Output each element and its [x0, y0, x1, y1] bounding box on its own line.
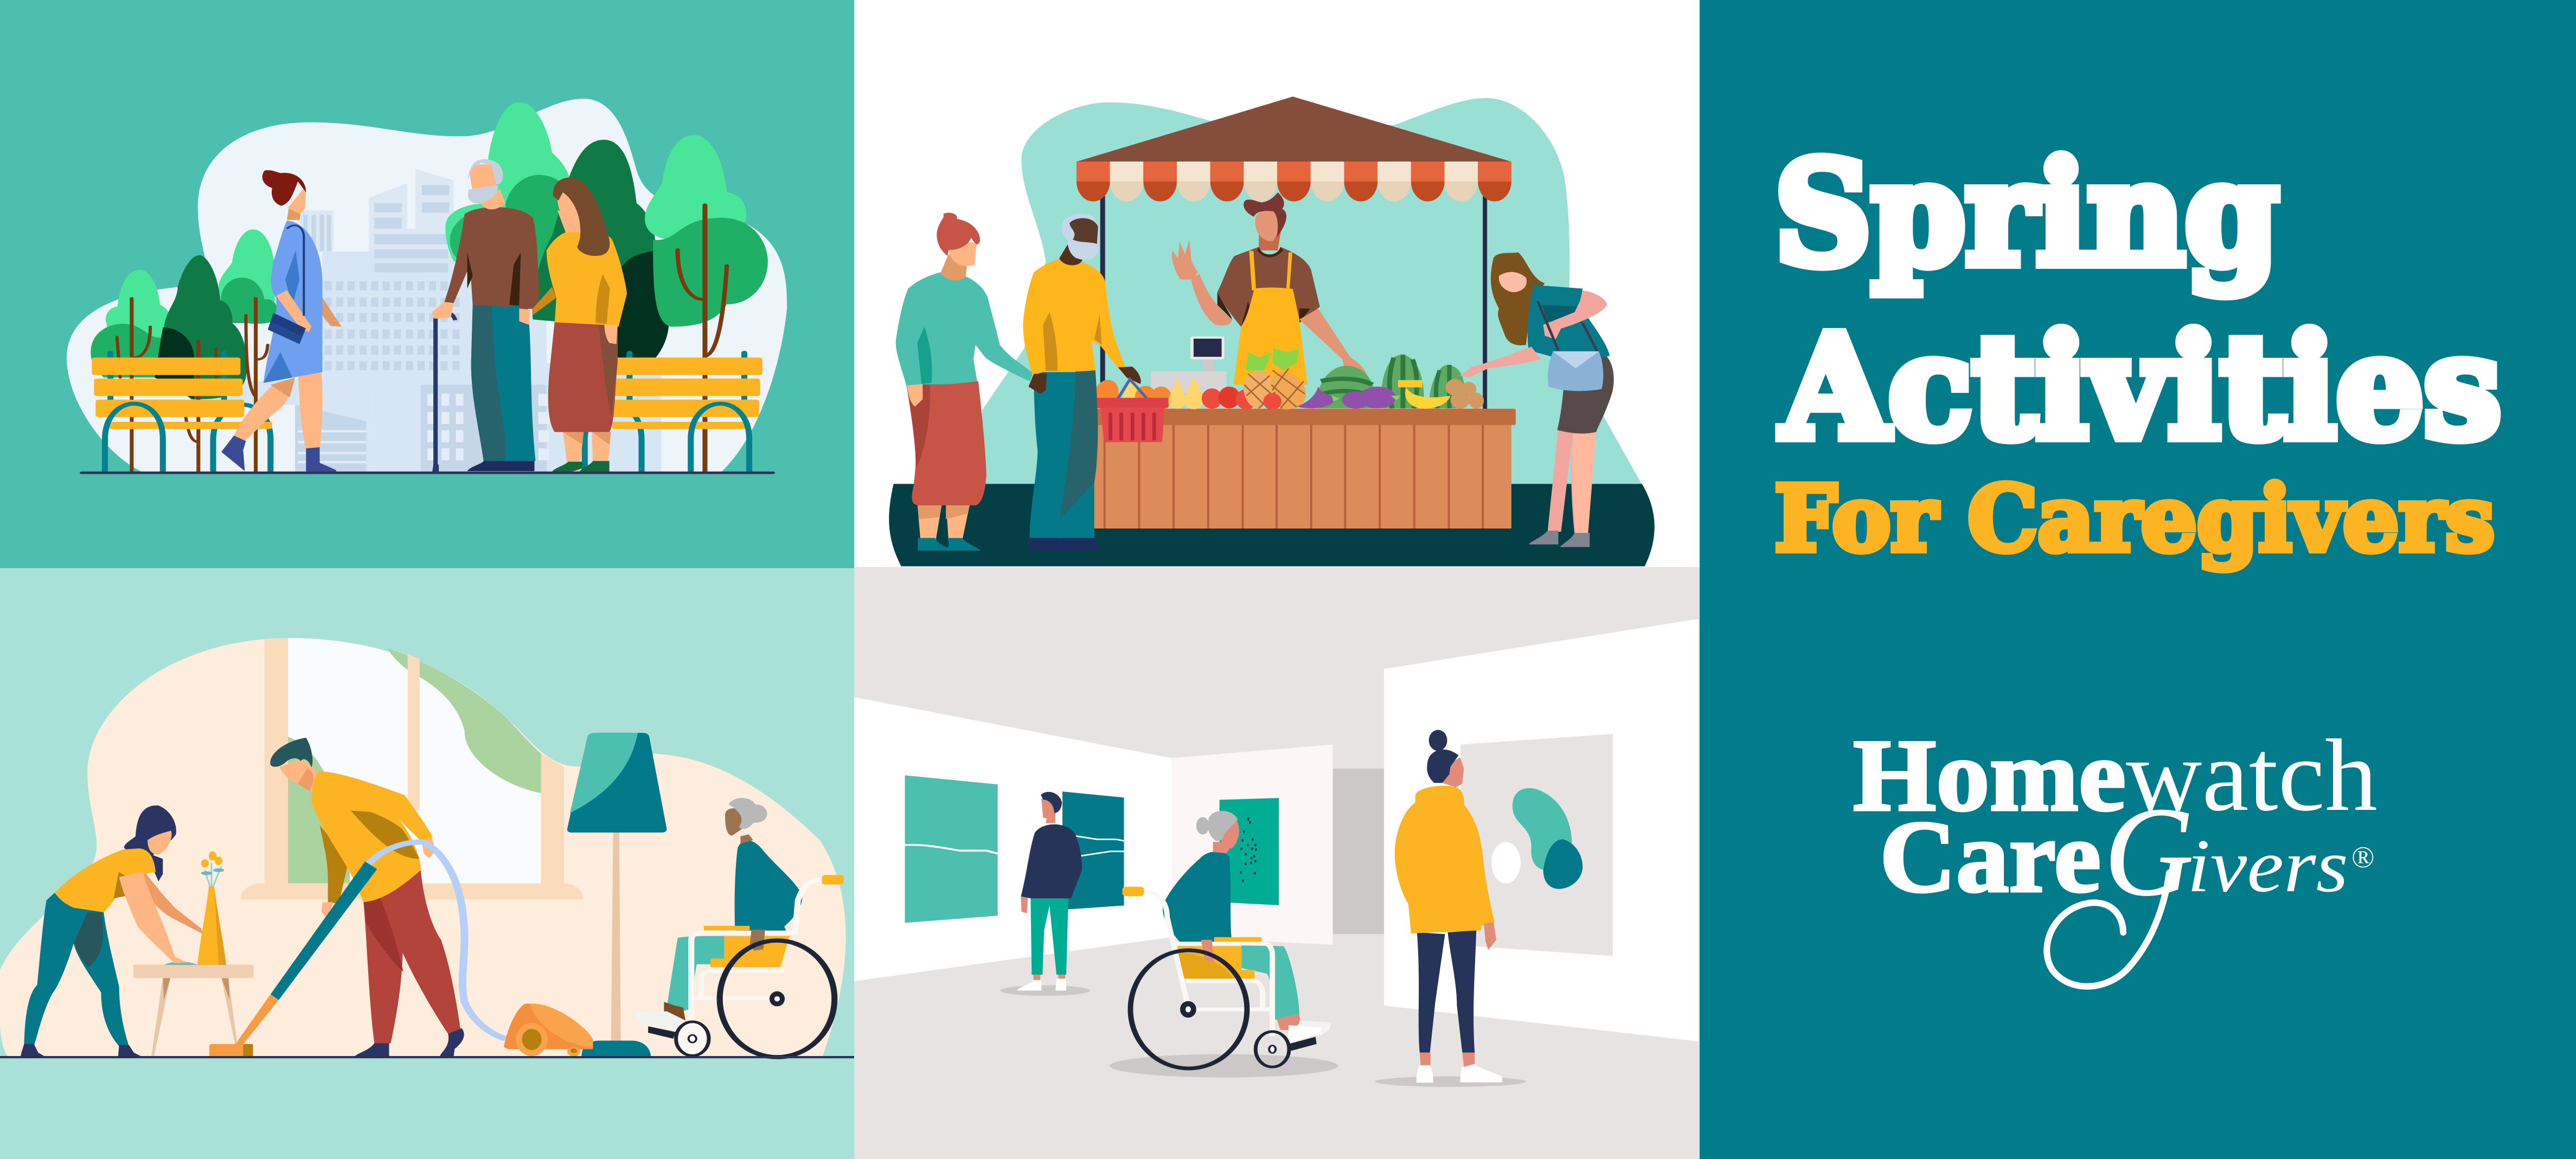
walking woman: [221, 170, 342, 472]
vendor: [1172, 192, 1368, 385]
counter: [1086, 409, 1516, 529]
elderly man with cane: [432, 159, 540, 472]
left bench: [92, 353, 272, 472]
shopping basket: [1097, 379, 1168, 442]
logo: Homewatch CareGivers: [1853, 719, 2378, 987]
title line: Activities: Activities: [1779, 304, 2501, 471]
man with basket: [1023, 214, 1141, 551]
woman in teal sweater: [896, 213, 1033, 551]
logo flourish: [2047, 873, 2169, 987]
panel: housework at home: [0, 568, 855, 1159]
logo: Homewatch CareGivers: watch: [2126, 719, 2378, 833]
title line: Spring: Spring: [1774, 130, 2279, 297]
panel: art gallery: [854, 567, 1700, 1159]
right bench: [585, 353, 762, 472]
park background blob: [67, 99, 787, 472]
painting: dark teal: [1062, 791, 1124, 910]
woman with shoulder bag: [1460, 252, 1614, 547]
window with view: [240, 638, 583, 899]
gallery walls: [854, 619, 1699, 1041]
subtitle: For Caregivers: For Caregivers: [1774, 466, 2495, 572]
painting: abstract shapes: [1460, 734, 1613, 956]
ground: [889, 484, 1655, 566]
vacuum cleaner: [209, 842, 593, 1057]
title: [1774, 130, 2501, 572]
market background blob: [982, 98, 1642, 485]
logo: Homewatch CareGivers: ®: [2351, 841, 2375, 874]
panel: walking in the park: [0, 0, 855, 570]
ground line: [80, 472, 775, 474]
floor lamp: [567, 733, 667, 1057]
man vacuuming: [270, 738, 464, 1057]
woman dusting: [21, 806, 203, 1057]
man looking at art: [1017, 792, 1082, 990]
woman in wheelchair: [634, 798, 844, 1057]
logo: Homewatch CareGivers: G: [2104, 781, 2194, 922]
woman in yellow sweater: [533, 177, 627, 472]
stall roof: [1077, 96, 1511, 162]
painting: teal with white line: [905, 775, 998, 923]
side table with vase: [133, 851, 254, 1057]
trees, left group: [91, 229, 279, 472]
painting: green with dots: [1220, 798, 1279, 905]
produce: [1096, 349, 1484, 410]
city skyline: [191, 169, 661, 472]
logo: Homewatch CareGivers: ivers: [2187, 824, 2348, 908]
cash register: [1151, 337, 1227, 393]
logo: Homewatch CareGivers: Care: [1880, 800, 2101, 914]
stall poles: [1100, 196, 1487, 410]
panel: farmers market: [854, 0, 1700, 568]
logo: Homewatch CareGivers: Home: [1853, 719, 2126, 833]
striped awning: [1076, 162, 1511, 202]
panel: title and logo: [1700, 0, 2576, 1159]
elderly woman in wheelchair: [1123, 811, 1332, 1068]
woman in yellow coat: [1395, 730, 1502, 1083]
room background blob: [0, 638, 845, 1057]
floor shadows: [1001, 986, 1526, 1087]
trees, right group: [445, 102, 768, 472]
floor line: [0, 1056, 854, 1058]
